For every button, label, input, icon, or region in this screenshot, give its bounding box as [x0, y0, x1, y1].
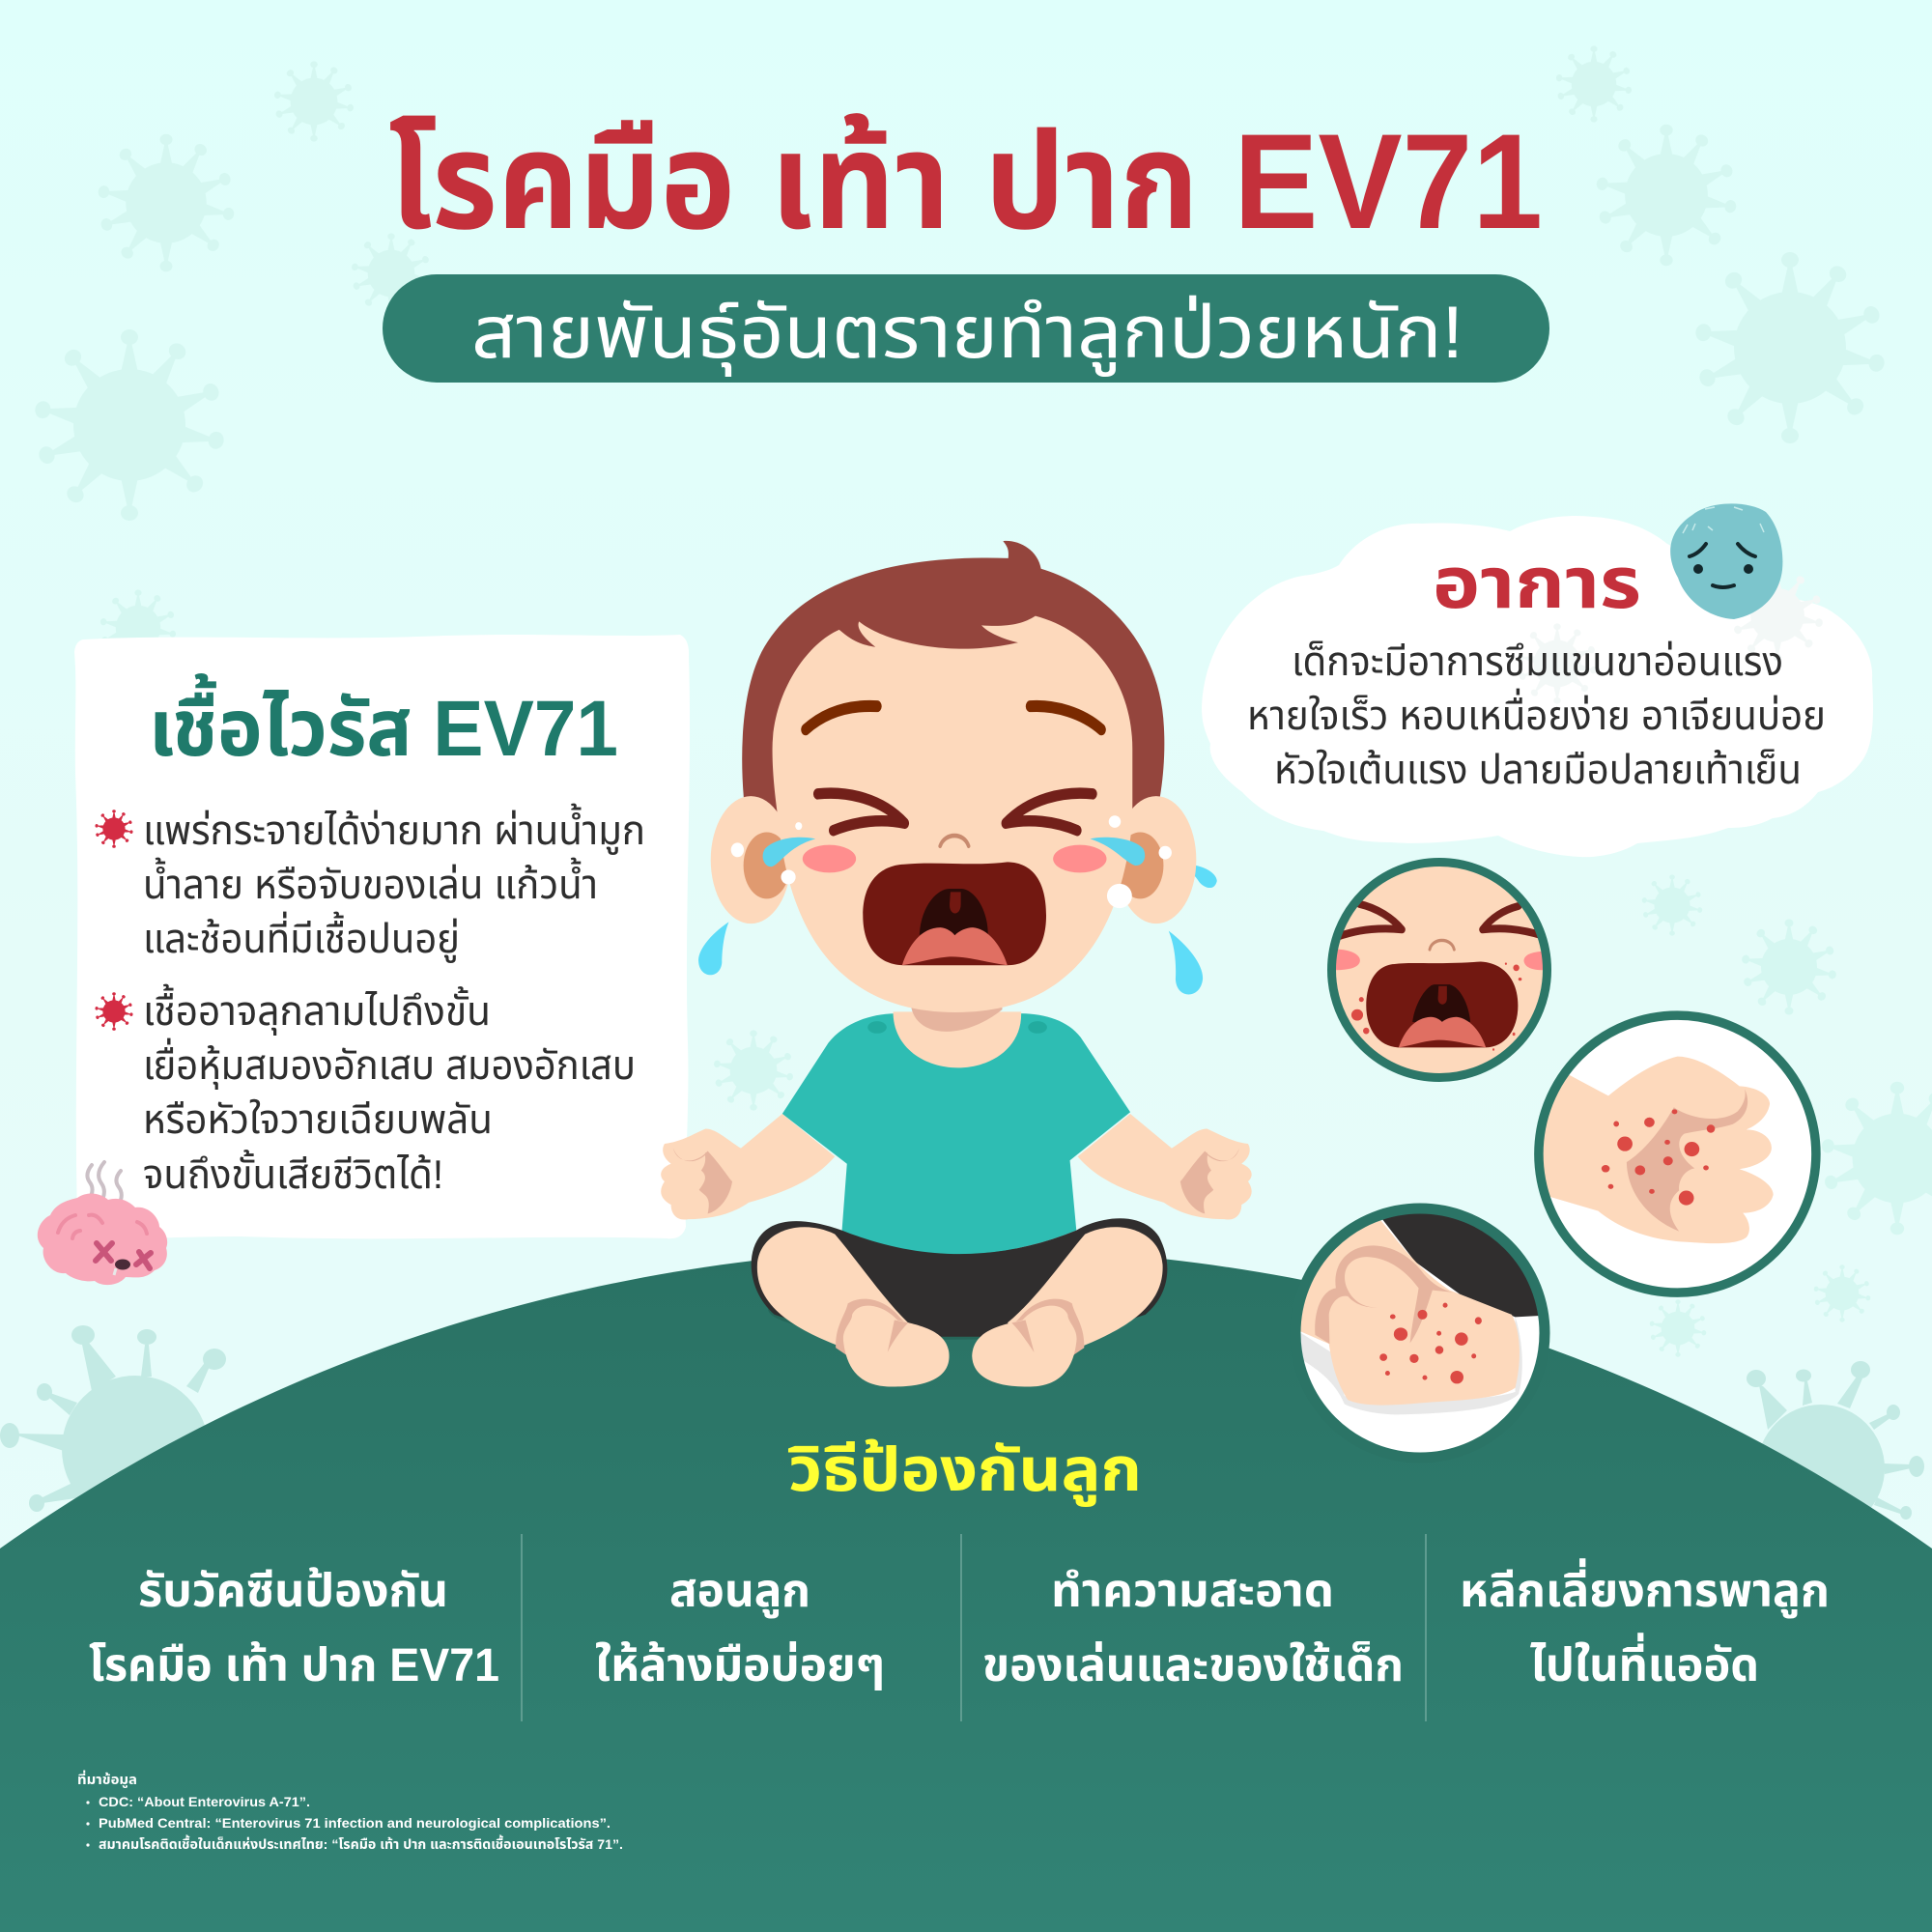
card background	[74, 635, 690, 1238]
column: cleaning: ทำความสะอาด	[1051, 1566, 1334, 1617]
hair	[742, 541, 1164, 832]
cheeks	[803, 845, 856, 872]
icon: sad face	[1670, 503, 1782, 619]
title: โรคมือ เท้า ปาก EV71	[388, 105, 1543, 257]
baby illustration	[661, 541, 1252, 1387]
legs shadow	[768, 1279, 1143, 1340]
arms	[661, 1114, 835, 1220]
legs	[757, 1227, 1163, 1364]
text block: spread: และช้อนที่มีเชื้อปนอยู่	[143, 911, 460, 963]
sources: CDC: “About Enterovirus A-71”.	[99, 1794, 310, 1809]
tears falling	[698, 865, 1217, 994]
column: handwashing: สอนลูก	[669, 1566, 810, 1619]
sources: สมาคมโรคติดเชื้อในเด็กแห่งประเทศไทย: “โรคมือ เท้า ปาก และการติดเชื้อเอนเทอโรไวรัส 71”.	[99, 1834, 623, 1852]
face	[773, 616, 1132, 1012]
text block: spread: แพร่กระจายได้ง่ายมาก ผ่านน้ำมูก	[143, 803, 645, 855]
big virus right	[1747, 1361, 1924, 1532]
ears	[711, 796, 1196, 923]
column: cleaning: ของเล่นและของใช้เด็ก	[982, 1640, 1404, 1691]
column: handwashing	[595, 1566, 885, 1691]
tears on face	[731, 815, 1172, 908]
sources: ที่มาข้อมูล	[77, 1770, 137, 1789]
sources	[77, 1770, 623, 1852]
text block: severity	[143, 983, 636, 1197]
feet	[836, 1299, 1084, 1387]
subtitle pill	[383, 274, 1549, 383]
background virus pattern	[34, 45, 1932, 1357]
panel: symptoms cloud	[1202, 503, 1873, 857]
text block: severity: เยื่อหุ้มสมองอักเสบ สมองอักเสบ	[143, 1037, 636, 1090]
heading: prevention: วิธีป้องกันลูก	[788, 1436, 1142, 1507]
icon: red virus	[95, 810, 133, 848]
column: handwashing: ให้ล้างมือบ่อยๆ	[595, 1640, 885, 1691]
text block: spread	[143, 803, 645, 963]
shirt	[782, 1013, 1130, 1254]
icon: dizzy brain	[38, 1162, 167, 1285]
column: vaccine: รับวัคซีนป้องกัน	[138, 1566, 448, 1617]
text block: severity: หรือหัวใจวายเฉียบพลัน	[143, 1096, 493, 1142]
shorts	[752, 1218, 1167, 1337]
big virus left	[0, 1325, 226, 1522]
text block: severity: เชื้ออาจลุกลามไปถึงขั้น	[143, 983, 491, 1036]
text block: หายใจเร็ว หอบเหนื่อยง่าย อาเจียนบ่อย	[1247, 688, 1826, 738]
heading: อาการ	[1433, 543, 1641, 623]
text block: เด็กจะมีอาการซึมแขนขาอ่อนแรง	[1292, 639, 1783, 684]
column: avoid crowds: หลีกเลี่ยงการพาลูก	[1460, 1558, 1830, 1619]
eyebrows	[806, 706, 1101, 729]
text block: หัวใจเต้นแรง ปลายมือปลายเท้าเย็น	[1274, 747, 1802, 792]
icon: red virus	[95, 992, 133, 1031]
eyes	[817, 793, 1093, 831]
column: avoid crowds: ไปในที่แออัด	[1530, 1633, 1759, 1691]
sources: PubMed Central: “Enterovirus 71 infection and neurological complications”.	[99, 1815, 611, 1831]
heading: เชื้อไวรัส EV71	[149, 672, 618, 773]
text block	[1247, 639, 1826, 792]
mouth	[863, 862, 1046, 965]
column: avoid crowds	[1460, 1558, 1830, 1691]
hill	[0, 1248, 1932, 1932]
shirt collar spots	[867, 1021, 887, 1034]
nose	[940, 836, 969, 846]
text block: spread: น้ำลาย หรือจับของเล่น แก้วน้ำ	[143, 857, 598, 907]
circle: mouth sores	[1329, 862, 1550, 1078]
panel: EV71 virus	[74, 635, 690, 1238]
cloud shape	[1202, 516, 1873, 857]
column: vaccine	[89, 1566, 499, 1691]
circle: foot rash	[1294, 1197, 1547, 1458]
subtitle pill: สายพันธุ์อันตรายทำลูกป่วยหนัก!	[471, 292, 1463, 377]
column: cleaning	[982, 1566, 1404, 1691]
column: vaccine: โรคมือ เท้า ปาก EV71	[89, 1640, 499, 1691]
circle: hand rash	[1536, 1015, 1816, 1293]
text block: severity: จนถึงขั้นเสียชีวิตได้!	[143, 1149, 443, 1197]
neck	[894, 1011, 1021, 1067]
